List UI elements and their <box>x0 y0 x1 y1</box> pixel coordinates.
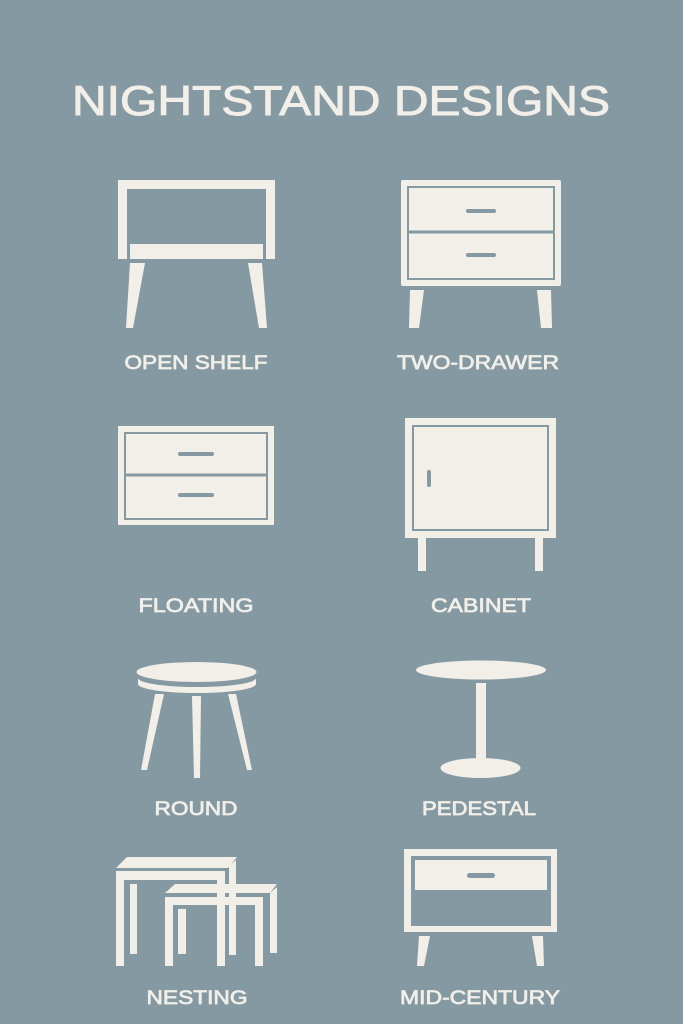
label: two-drawer: TWO-DRAWER <box>397 353 559 374</box>
label: floating: FLOATING <box>138 596 254 617</box>
label: mid-century: MID-CENTURY <box>400 988 560 1009</box>
icon: mid-century <box>404 849 557 966</box>
label: open shelf: OPEN SHELF <box>124 353 268 374</box>
title: NIGHTSTAND DESIGNS <box>72 77 610 124</box>
icon: nesting tables <box>116 857 277 966</box>
label: cabinet: CABINET <box>431 596 531 617</box>
icon: two-drawer <box>401 180 561 328</box>
label: pedestal: PEDESTAL <box>422 799 536 820</box>
label: nesting: NESTING <box>146 988 248 1009</box>
label: round: ROUND <box>154 799 238 820</box>
icon: round <box>136 662 256 778</box>
icon: open shelf <box>118 180 275 328</box>
icon: cabinet <box>405 418 556 571</box>
icon: pedestal <box>416 660 546 778</box>
icon: floating <box>118 426 274 525</box>
